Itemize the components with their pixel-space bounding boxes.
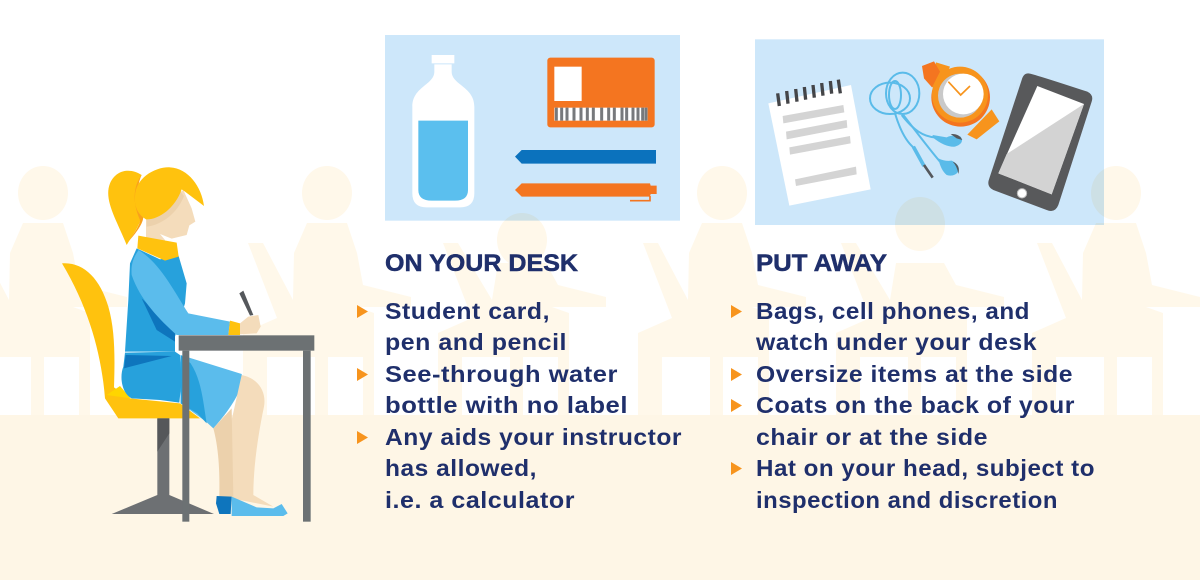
list: put away: Hat on your head, subject to <box>756 455 1095 481</box>
icon: watch <box>922 61 999 139</box>
background silhouettes of seated students <box>0 166 1200 415</box>
student figure <box>108 167 288 516</box>
list: put away: chair or at the side <box>756 424 988 450</box>
list: on your desk: bottle with no label <box>385 392 628 418</box>
list: put away: watch under your desk <box>755 329 1037 355</box>
background floor <box>0 415 1200 580</box>
list: on your desk: pen and pencil <box>385 329 567 355</box>
list: put away: Oversize items at the side <box>756 361 1073 387</box>
list: put away: inspection and discretion <box>756 487 1058 513</box>
icon: earbuds <box>870 73 962 178</box>
list: on your desk: See-through water <box>385 361 618 387</box>
list: put away: Bags, cell phones, and <box>756 298 1030 324</box>
heading: put away: PUT AWAY <box>756 250 887 277</box>
list: put away: Coats on the back of your <box>756 392 1075 418</box>
icon: smartphone <box>988 73 1092 211</box>
panel: put away items <box>755 39 1104 225</box>
list: on your desk <box>357 298 682 513</box>
list: on your desk: has allowed, <box>385 455 537 481</box>
list: put away <box>731 298 1095 513</box>
list: on your desk: i.e. a calculator <box>385 487 575 513</box>
panel: on your desk items <box>385 35 680 221</box>
chair <box>62 263 214 514</box>
icon: blue pencil <box>515 150 656 164</box>
list: on your desk: Any aids your instructor <box>385 424 682 450</box>
icon: water bottle <box>412 55 474 207</box>
icon: orange pen <box>515 183 657 201</box>
desk <box>179 335 314 522</box>
icon: student card <box>547 58 655 127</box>
icon: notepad <box>768 80 871 206</box>
heading: on your desk: ON YOUR DESK <box>385 250 578 277</box>
list: on your desk: Student card, <box>385 298 550 324</box>
illustration: student seated at desk <box>62 167 314 522</box>
